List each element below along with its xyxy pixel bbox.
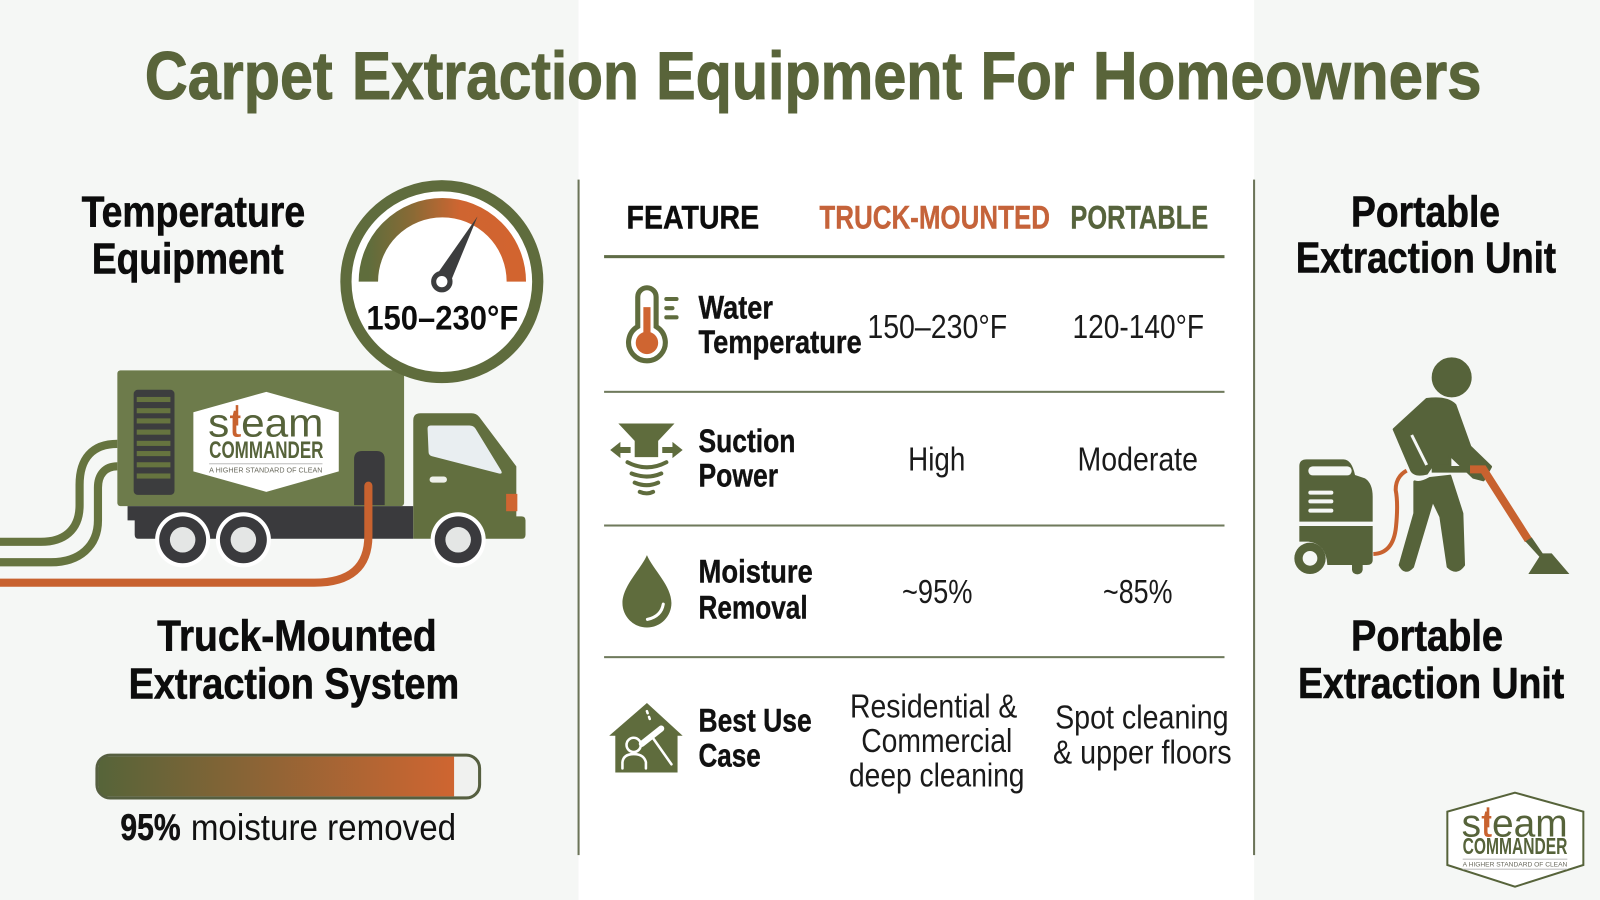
temperature gauge <box>346 186 538 378</box>
machine <box>1294 459 1373 574</box>
value truck: moisture: ~95% <box>902 574 972 611</box>
label: moisture removal: Removal <box>698 588 808 625</box>
value truck: suction: High <box>908 441 965 478</box>
heading: temperature equipment: Temperature <box>82 188 305 237</box>
heading: truck-mounted extraction system: Truck-Mounted <box>157 612 437 661</box>
title: Extraction <box>352 39 639 114</box>
value truck: best use: Commercial <box>861 723 1012 760</box>
heading: truck-mounted extraction system: Extraction System <box>129 659 459 708</box>
icon: house with cleaner <box>609 703 683 772</box>
row: moisture removal <box>622 553 1172 628</box>
value portable: best use: & upper floors <box>1053 734 1232 771</box>
row: suction power <box>610 422 1198 494</box>
icon: suction funnel <box>610 423 683 493</box>
label: moisture removal <box>698 553 813 625</box>
orange hose <box>0 486 368 583</box>
label: water temperature: Temperature <box>698 323 862 360</box>
heading: portable extraction unit top: Extraction Unit <box>1296 233 1556 282</box>
value portable: water temperature: 120-140°F <box>1072 309 1204 346</box>
table header: TRUCK-MOUNTED <box>819 199 1050 236</box>
value truck: best use: deep cleaning <box>849 758 1024 795</box>
heading: portable extraction unit top: Portable <box>1351 188 1500 237</box>
label: water temperature: Water <box>698 288 773 325</box>
icon: thermometer <box>629 288 679 361</box>
right divider <box>1253 180 1255 855</box>
label: best use case <box>698 702 812 773</box>
heading: temperature equipment: Equipment <box>92 234 284 283</box>
title: Equipment <box>656 39 962 114</box>
label: water temperature <box>698 288 862 360</box>
table header: FEATURE <box>627 199 759 236</box>
label: best use case: Best Use <box>698 702 812 739</box>
label: suction power: Power <box>698 457 778 494</box>
truck <box>117 370 526 567</box>
caption: moisture removed: moisture removed <box>191 807 456 848</box>
heading: portable extraction unit bottom: Portable <box>1351 612 1503 661</box>
heading: truck-mounted extraction system <box>129 612 459 708</box>
hose <box>1373 471 1407 554</box>
olive hoses <box>0 444 117 562</box>
logo on truck: COMMANDER <box>209 437 324 464</box>
row: best use case <box>609 688 1232 795</box>
left divider <box>578 180 580 855</box>
wand and nozzle <box>1432 469 1569 574</box>
row: water temperature <box>629 288 1204 361</box>
logo: steam commander: steam <box>1462 802 1568 846</box>
panel: comparison table <box>604 199 1232 795</box>
icon: person with portable extractor <box>1294 359 1569 574</box>
value portable: best use: Spot cleaning <box>1055 700 1229 737</box>
cab <box>413 413 526 539</box>
temperature gauge: 150–230°F <box>366 300 518 338</box>
value portable: suction: Moderate <box>1078 441 1198 478</box>
label: moisture removal: Moisture <box>698 553 813 590</box>
logo on truck: steam <box>208 402 323 446</box>
person <box>1394 359 1491 570</box>
logo: steam commander: A HIGHER STANDARD OF CLEAN <box>1463 861 1568 868</box>
value truck: water temperature: 150–230°F <box>867 309 1007 346</box>
table header: PORTABLE <box>1070 199 1208 236</box>
vent <box>134 390 174 495</box>
panel: truck-mounted system <box>0 186 538 848</box>
logo on truck <box>193 392 339 492</box>
table header <box>604 199 1224 258</box>
value portable: moisture: ~85% <box>1103 574 1172 611</box>
heading: portable extraction unit bottom <box>1298 612 1565 708</box>
caption: moisture removed: 95% <box>120 807 181 848</box>
title: For <box>981 39 1074 114</box>
logo on truck: A HIGHER STANDARD OF CLEAN <box>209 466 322 474</box>
title <box>145 39 1482 114</box>
title: Homeowners <box>1093 39 1482 114</box>
label: best use case: Case <box>698 736 761 773</box>
heading: portable extraction unit top <box>1296 188 1556 282</box>
label: suction power <box>698 422 795 494</box>
value truck: best use: Residential & <box>850 688 1017 725</box>
title: Carpet <box>145 39 333 114</box>
value truck: best use <box>849 688 1024 795</box>
panel: portable extraction unit <box>1294 188 1583 887</box>
logo: steam commander <box>1447 793 1583 887</box>
label: suction power: Suction <box>698 422 795 459</box>
progress bar: 95 percent <box>97 755 480 798</box>
icon: water drop <box>622 555 671 628</box>
value portable: best use <box>1053 700 1232 771</box>
wheels <box>155 512 486 567</box>
heading: temperature equipment <box>82 188 305 283</box>
